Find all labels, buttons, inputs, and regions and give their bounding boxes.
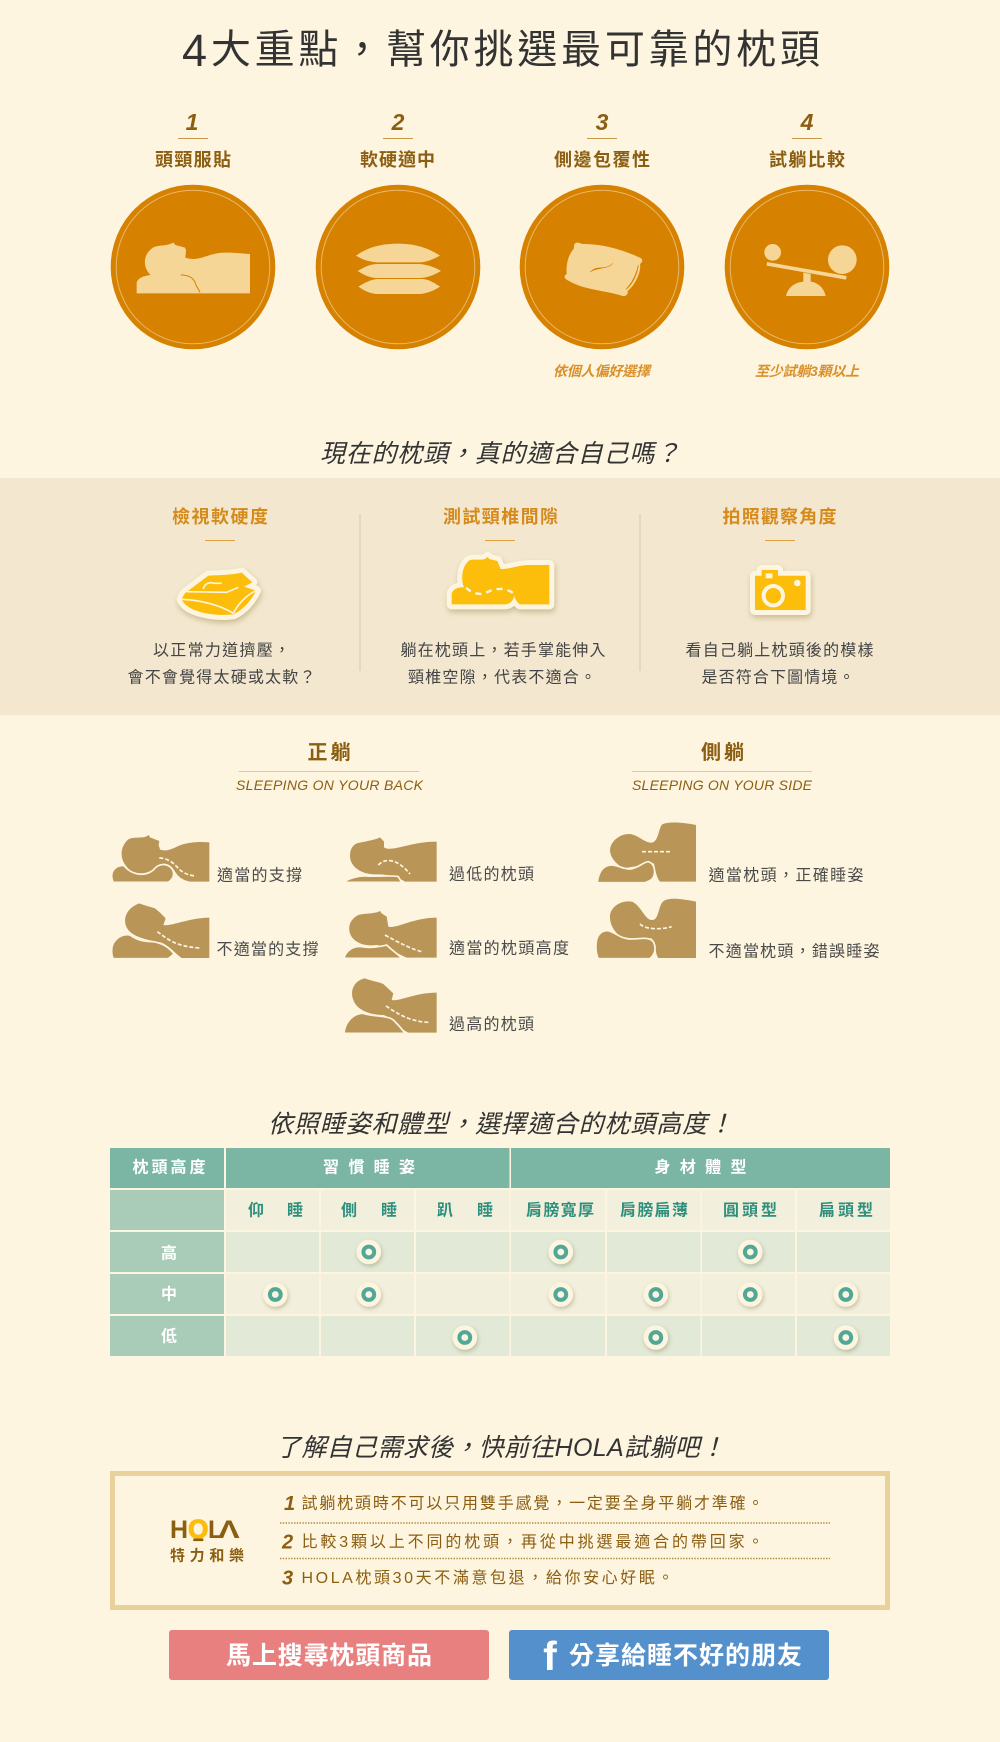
heading: go try at HOLA: 了解自己需求後，快前往HOLA試躺吧！: [276, 1434, 725, 1462]
heading: side sleeping: 側躺: [701, 741, 744, 764]
label: 過低的枕頭: [449, 866, 534, 884]
heading: back sleeping: 正躺: [308, 741, 350, 764]
tip 3: HOLA枕頭30天不滿意包退，給你安心好眠。: [302, 1568, 674, 1587]
button: search pillows: [169, 1630, 489, 1680]
panel: sleeping on your back: [112, 741, 569, 1034]
figure: proper support: [112, 835, 209, 882]
test 3: photo angle: [686, 506, 874, 686]
logo: HOLA: Λ: [218, 1516, 240, 1544]
row: high: [110, 1232, 890, 1272]
panel: HOLA tips box: [112, 1474, 888, 1608]
test 1: firmness: 檢視軟硬度: [172, 506, 268, 527]
figure: improper support: [112, 903, 209, 959]
tip 1: 試躺枕頭時不可以只用雙手感覺，一定要全身平躺才準確。: [302, 1494, 764, 1512]
logo: HOLA: [170, 1514, 244, 1564]
test 1: firmness: 以正常力道擠壓，: [153, 642, 290, 660]
logo: HOLA: 特力和樂: [170, 1546, 244, 1564]
subheader row: 側睡: [341, 1202, 397, 1220]
point 1: 1: [186, 109, 198, 135]
heading: back sleeping: [236, 741, 424, 793]
heading: choose height: 依照睡姿和體型，選擇適合的枕頭高度！: [268, 1110, 733, 1138]
test 1: firmness: [128, 506, 316, 686]
logo: HOLA: O: [188, 1514, 208, 1544]
caption: 至少試躺3顆以上: [755, 363, 860, 379]
panel: four key points: [111, 109, 889, 379]
icon: balance scale: [764, 244, 857, 296]
test 3: photo angle: 看自己躺上枕頭後的模樣: [686, 642, 874, 660]
row: low: 低: [161, 1326, 177, 1346]
point 4: [725, 109, 889, 379]
icon: head on pillow: [137, 243, 250, 293]
point 2: 2: [391, 109, 405, 135]
test 3: photo angle: 是否符合下圖情境。: [702, 668, 854, 686]
label: 不適當枕頭，錯誤睡姿: [708, 942, 880, 960]
heading: side sleeping: SLEEPING ON YOUR SIDE: [632, 777, 813, 793]
point 3: [520, 109, 684, 379]
table: pillow height matrix: [110, 1148, 890, 1356]
point 3: 側邊包覆性: [554, 150, 650, 170]
panel: three tests band: [0, 478, 1000, 715]
figure: improper side posture: [596, 899, 696, 959]
icon: hand pressing pillow: [182, 573, 256, 615]
header row: [110, 1148, 890, 1188]
label: 不適當的支撐: [216, 940, 318, 958]
subheader row: 趴睡: [437, 1202, 493, 1220]
test 1: firmness: 會不會覺得太硬或太軟？: [128, 668, 316, 686]
row: high: 高: [161, 1244, 177, 1262]
button: share on facebook: 分享給睡不好的朋友: [569, 1642, 802, 1670]
point 2: 軟硬適中: [360, 149, 435, 170]
header row: 枕頭高度: [132, 1158, 206, 1176]
subheader row: 肩膀扁薄: [620, 1200, 688, 1220]
icon: puffy pillow: [565, 243, 642, 296]
header row: 習慣睡姿: [323, 1158, 415, 1176]
caption: 依個人偏好選擇: [553, 363, 652, 379]
subheader row: 扁頭型: [819, 1202, 873, 1220]
ring markers: [263, 1240, 858, 1350]
button: share on facebook: [509, 1630, 829, 1680]
point 1: 頭頸服貼: [155, 150, 231, 170]
test 2: neck gap: [400, 507, 606, 686]
test 2: neck gap: 躺在枕頭上，若手掌能伸入: [400, 642, 606, 660]
figure: proper pillow height: [344, 911, 437, 958]
header row: 身材體型: [654, 1158, 746, 1176]
tip 2: 比較3顆以上不同的枕頭，再從中挑選最適合的帶回家。: [302, 1533, 764, 1551]
row: medium: [110, 1274, 890, 1314]
logo: HOLA: H: [170, 1516, 188, 1544]
test 3: photo angle: 拍照觀察角度: [722, 506, 836, 527]
test 2: neck gap: 頸椎空隙，代表不適合。: [408, 668, 596, 686]
row: low: [110, 1316, 890, 1356]
tip 3: 3: [282, 1568, 293, 1590]
subheader row: 肩膀寬厚: [526, 1200, 594, 1220]
figure: pillow too high: [344, 978, 437, 1033]
icon: stacked pillows: [356, 244, 441, 294]
point 4: 試躺比較: [769, 149, 845, 170]
label: 適當枕頭，正確睡姿: [708, 866, 864, 884]
subheader row: 仰睡: [248, 1202, 303, 1220]
test 2: neck gap: 測試頸椎間隙: [443, 507, 558, 527]
label: 適當的枕頭高度: [449, 940, 569, 958]
subheader row: 圓頭型: [723, 1202, 777, 1220]
figure: pillow too low: [344, 837, 437, 882]
point 1: [111, 109, 275, 349]
figure: proper side posture: [597, 822, 696, 883]
label: 適當的支撐: [217, 866, 302, 884]
point 3: 3: [596, 109, 609, 135]
logo: HOLA: L: [208, 1516, 223, 1544]
tip 1: 1: [284, 1493, 295, 1515]
panel: sleeping on your side: [596, 741, 880, 960]
label: 過高的枕頭: [449, 1016, 534, 1034]
heading: side sleeping: [632, 741, 813, 793]
icon: camera: [755, 570, 806, 610]
point 4: 4: [800, 109, 814, 135]
heading: check your pillow: 現在的枕頭，真的適合自己嗎？: [320, 440, 680, 468]
icon: head on pillow with dashed spine: [452, 557, 549, 604]
tip 2: 2: [281, 1532, 293, 1554]
icon: facebook f: f: [543, 1633, 557, 1679]
title: 4大重點，幫你挑選最可靠的枕頭: [182, 24, 820, 76]
button: search pillows: 馬上搜尋枕頭商品: [226, 1642, 432, 1670]
row: medium: 中: [161, 1286, 177, 1304]
heading: back sleeping: SLEEPING ON YOUR BACK: [236, 777, 424, 793]
subheader row: [110, 1190, 890, 1230]
point 2: [316, 109, 480, 349]
